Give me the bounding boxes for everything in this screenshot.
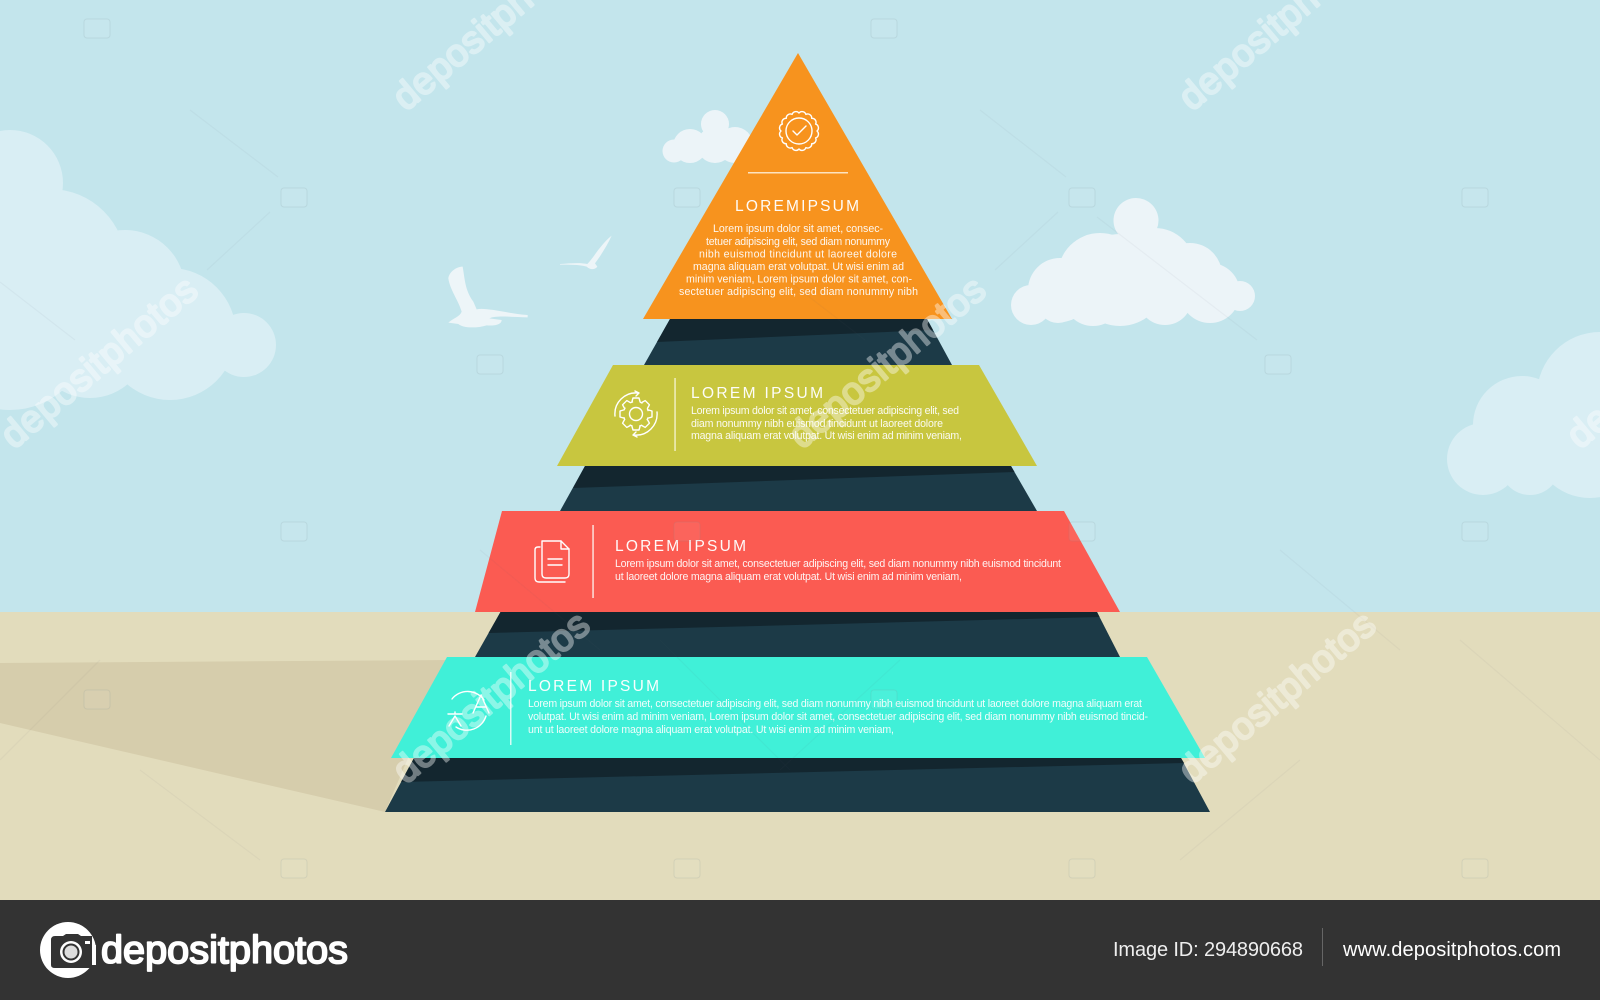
footer bar — [0, 900, 1600, 1000]
heading: LOREM IPSUM — [528, 678, 659, 695]
heading: LOREM IPSUM — [615, 538, 746, 555]
cloud: small behind apex — [662, 110, 753, 163]
logo: wordmark: depositphotos — [101, 929, 348, 972]
body text: nibh euismod tincidunt ut laoreet dolore — [699, 248, 897, 260]
pyramid — [385, 53, 1210, 812]
icon: document — [535, 541, 569, 582]
pyramid shadow on ground — [0, 660, 450, 812]
body text: tetuer adipiscing elit, sed diam nonummy — [706, 236, 891, 248]
body text: Lorem ipsum dolor sit amet, consec- — [713, 223, 883, 235]
watermark: depositphotos text: depositphotos — [1171, 604, 1384, 792]
watermark: depositphotos text: depositphotos — [385, 604, 598, 792]
body text — [679, 223, 918, 298]
body text — [615, 558, 1061, 583]
body text: volutpat. Ut wisi enim ad minim veniam, Lorem ipsum dolor sit amet, consectetuer adipiscing elit, sed diam nonummy nibh euismod tincid- — [528, 711, 1148, 723]
body text: magna aliquam erat volutpat. Ut wisi enim ad minim veniam, — [691, 430, 962, 442]
divider line — [510, 672, 512, 745]
dark band 2 — [560, 466, 1037, 511]
cloud: far right — [1447, 332, 1600, 498]
cloud: right white — [1011, 198, 1255, 326]
dark band 3 — [475, 612, 1120, 657]
watermark: camera icons — [84, 19, 1488, 878]
panel: orange apex — [643, 53, 952, 319]
watermark: depositphotos text: depositphotos — [781, 269, 994, 457]
icon: translate — [448, 691, 489, 730]
image id: Image ID: 294890668 — [1113, 939, 1303, 961]
body text: sectetuer adipiscing elit, sed diam nonummy nibh — [679, 286, 918, 298]
body text: Lorem ipsum dolor sit amet, consectetuer adipiscing elit, sed diam nonummy nibh euismod tincidunt — [615, 558, 1061, 570]
body text — [691, 405, 962, 442]
dark band 4 — [385, 758, 1210, 812]
body text: diam nonummy nibh euismod tincidunt ut laoreet dolore — [691, 418, 943, 430]
body text: ut laoreet dolore magna aliquam erat volutpat. Ut wisi enim ad minim veniam, — [615, 571, 962, 583]
body text: Lorem ipsum dolor sit amet, consectetuer adipiscing elit, sed — [691, 405, 959, 417]
body text: Lorem ipsum dolor sit amet, consectetuer adipiscing elit, sed diam nonummy nibh euismod tincidunt ut laoreet dolore magna aliquam erat — [528, 698, 1142, 710]
panel: teal tier — [391, 657, 1205, 758]
ground — [0, 612, 1600, 900]
bird: large — [448, 267, 528, 327]
website url: www.depositphotos.com — [1342, 939, 1561, 961]
watermark: depositphotos text — [0, 0, 1600, 792]
body text — [528, 698, 1148, 736]
body text: magna aliquam erat volutpat. Ut wisi enim ad — [693, 261, 904, 273]
footer divider — [1322, 928, 1323, 966]
panel: olive tier — [557, 365, 1037, 466]
body text: unt ut laoreet dolore magna aliquam erat volutpat. Ut wisi enim ad minim veniam, — [528, 724, 894, 736]
icon: gear with arrows — [615, 391, 657, 437]
heading: LOREM IPSUM — [691, 385, 823, 402]
divider line — [592, 525, 594, 598]
icon: check badge — [780, 112, 818, 150]
divider line — [674, 378, 676, 451]
logo: camera badge — [40, 922, 96, 978]
panel: red tier — [475, 511, 1120, 612]
divider line — [748, 172, 848, 174]
bird: small — [560, 236, 612, 269]
heading: LOREMIPSUM — [735, 198, 859, 215]
sky background — [0, 0, 1600, 612]
dark band 1 — [644, 319, 952, 365]
cloud: left large — [0, 130, 276, 410]
body text: minim veniam, Lorem ipsum dolor sit amet, con- — [686, 274, 912, 286]
